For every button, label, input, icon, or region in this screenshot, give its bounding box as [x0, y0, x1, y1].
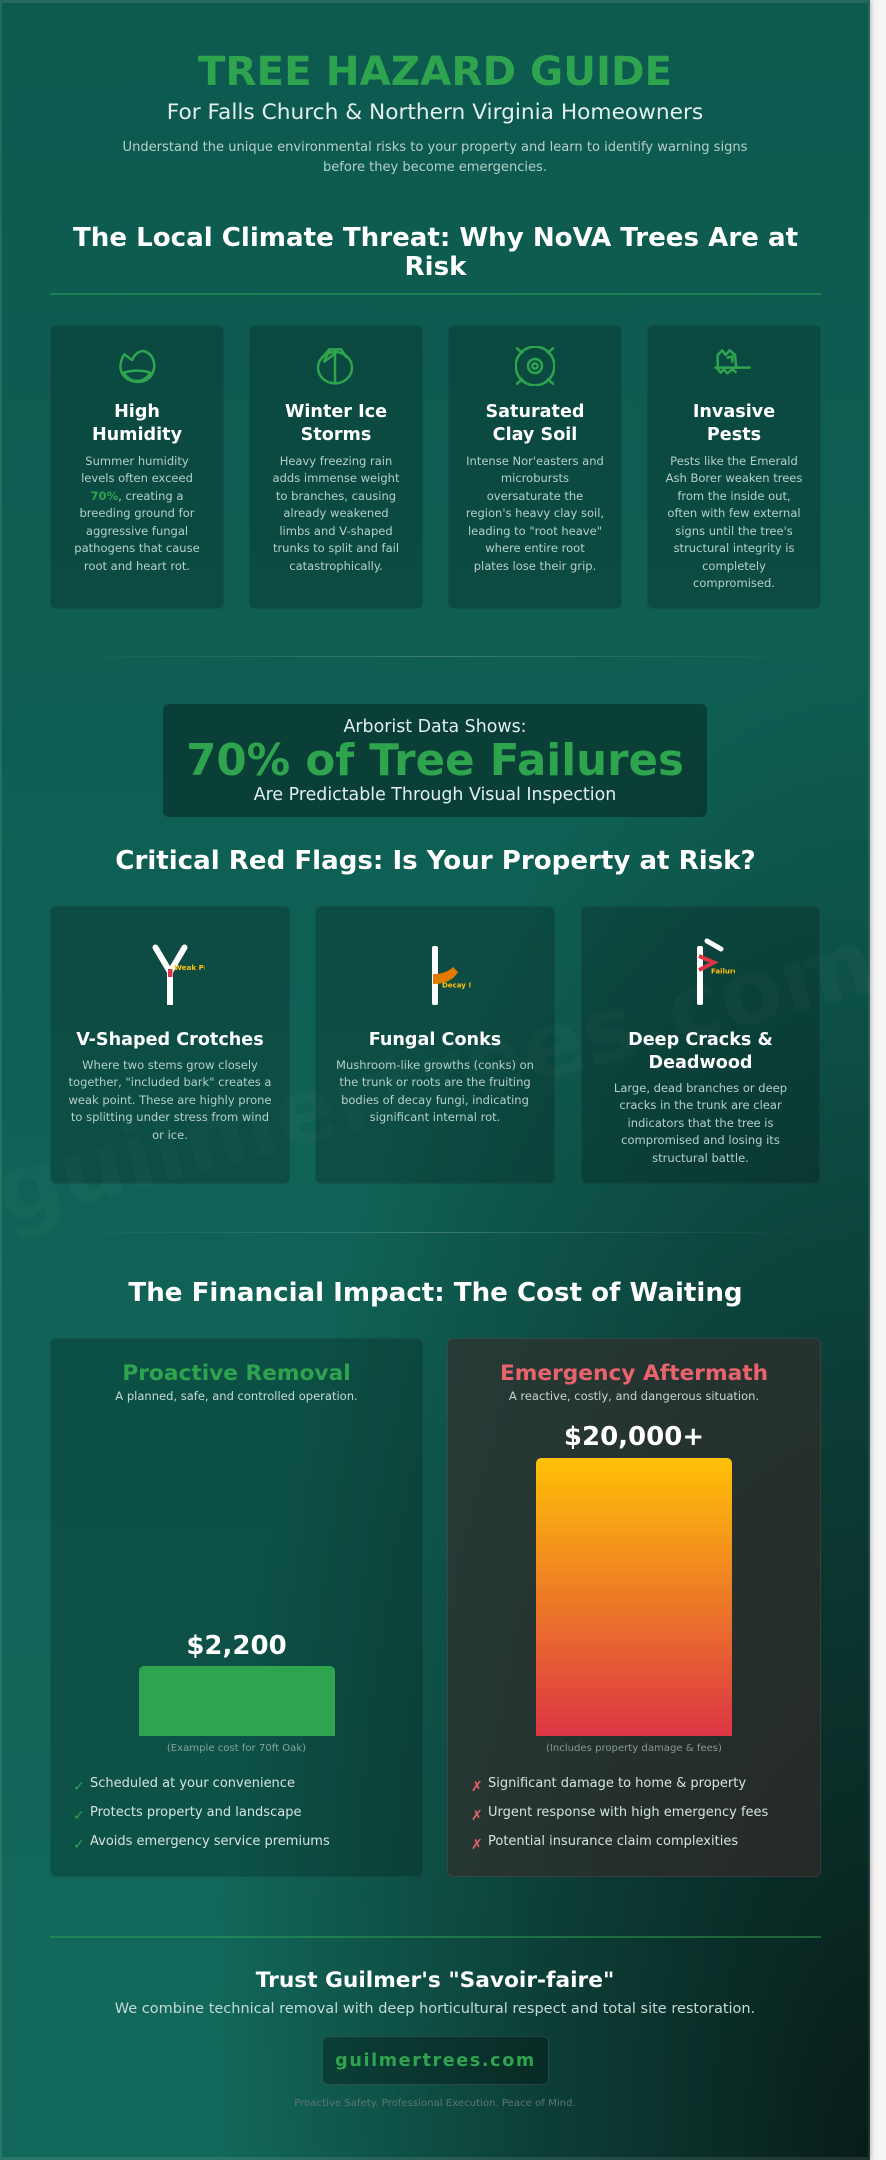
- divider: [50, 1232, 821, 1233]
- risk list: [471, 1776, 768, 1853]
- risk: Potential insurance claim complexities: [488, 1834, 738, 1849]
- cost note: (Includes property damage & fees): [546, 1743, 722, 1754]
- icon: ice storm: [316, 348, 354, 385]
- card title: [628, 1030, 773, 1073]
- heading: local climate threat: Risk: [405, 252, 466, 282]
- card title: Saturated: [486, 402, 584, 422]
- card title: Humidity: [92, 425, 182, 445]
- footer heading: Trust Guilmer's "Savoir-faire": [256, 1968, 614, 1993]
- card text: Summer humidity: [85, 454, 189, 468]
- panel: proactive removal: ✓: [73, 1779, 85, 1795]
- card text: together, "included bark" creates a: [69, 1075, 271, 1089]
- footer rule: [50, 1936, 821, 1938]
- card title: Deadwood: [648, 1053, 753, 1073]
- card text: Heavy freezing rain: [280, 454, 392, 468]
- cost note: (Example cost for 70ft Oak): [167, 1743, 306, 1754]
- panel title: Proactive Removal: [122, 1361, 351, 1386]
- card text: root and heart rot.: [84, 559, 190, 573]
- card text: to branches, causing: [276, 489, 396, 503]
- card text: Mushroom-like growths (conks) on: [336, 1058, 534, 1072]
- card text: [336, 1058, 534, 1124]
- card text: Intense Nor'easters and: [466, 454, 604, 468]
- panel subtitle: A planned, safe, and controlled operation.: [115, 1389, 358, 1403]
- card text: structural battle.: [652, 1151, 749, 1165]
- heading: local climate threat: The Local Climate Threat: Why NoVA Trees Are at: [73, 223, 798, 253]
- card title: Deep Cracks &: [628, 1030, 773, 1050]
- card text: weak point. These are highly prone: [68, 1093, 272, 1107]
- footer text: We combine technical removal with deep horticultural respect and total site restoration.: [115, 2001, 755, 2017]
- risk: Urgent response with high emergency fees: [488, 1805, 768, 1820]
- card text: structural integrity is: [674, 541, 794, 555]
- panel: proactive removal: [50, 1338, 423, 1877]
- panel: emergency aftermath: ✗: [471, 1837, 483, 1853]
- card text: completely: [702, 559, 766, 573]
- card text: breeding ground for: [80, 506, 194, 520]
- intro text: before they become emergencies.: [323, 160, 547, 174]
- panel: fungal conks: [315, 906, 555, 1184]
- card text: [666, 454, 802, 590]
- cost bar: [139, 1666, 335, 1736]
- card text: pathogens that cause: [74, 541, 200, 555]
- panel: emergency aftermath: [447, 1338, 821, 1877]
- card text: trunks to split and fail: [273, 541, 399, 555]
- benefit: Scheduled at your convenience: [90, 1776, 295, 1791]
- card title: [693, 402, 775, 445]
- card text: signs until the tree's: [675, 524, 793, 538]
- card text: [466, 454, 604, 573]
- callout: 70 percent statistic: [163, 704, 707, 817]
- icon: pests: [714, 349, 751, 375]
- card title: [92, 402, 182, 445]
- card text: already weakened: [283, 506, 389, 520]
- website badge: guilmertrees.com: [335, 2051, 536, 2071]
- illustration: fungal conk: [432, 946, 471, 1005]
- heading underline: [50, 293, 821, 295]
- benefit: Avoids emergency service premiums: [90, 1834, 330, 1849]
- icon: humidity: [119, 350, 156, 384]
- card text: limbs and V-shaped: [279, 524, 393, 538]
- panel: emergency aftermath: ✗: [471, 1779, 483, 1795]
- intro text: [123, 140, 747, 174]
- card text: indicators that the tree is: [628, 1116, 773, 1130]
- card text: compromised.: [693, 576, 775, 590]
- title: TREE HAZARD GUIDE: [198, 47, 672, 95]
- card text: from the inside out,: [677, 489, 791, 503]
- illustration: cracked trunk: [697, 938, 735, 1005]
- card text: [614, 1081, 787, 1165]
- card title: Pests: [707, 425, 761, 445]
- intro text: Understand the unique environmental risks to your property and learn to identify warning signs: [123, 140, 747, 154]
- illustration: fungal conk: Decay !: [442, 982, 471, 990]
- card text: levels often exceed: [81, 471, 193, 485]
- panel: saturated clay soil: [448, 325, 622, 609]
- card text: compromised and losing its: [621, 1133, 780, 1147]
- risk: Significant damage to home & property: [488, 1776, 746, 1791]
- card title: High: [114, 402, 160, 422]
- icon: soil: [515, 346, 555, 386]
- card text: [68, 1058, 272, 1142]
- card text: often with few external: [667, 506, 801, 520]
- heading: critical red flags: Critical Red Flags: Is Your Property at Risk?: [115, 846, 756, 876]
- card text: significant internal rot.: [370, 1110, 500, 1124]
- callout lead: Arborist Data Shows:: [343, 717, 526, 737]
- card text: Large, dead branches or deep: [614, 1081, 787, 1095]
- cost value: $20,000+: [564, 1422, 704, 1452]
- card text: catastrophically.: [289, 559, 383, 573]
- card text: bodies of decay fungi, indicating: [341, 1093, 529, 1107]
- card text: to splitting under stress from wind: [71, 1110, 269, 1124]
- divider: [50, 656, 821, 657]
- card text: adds immense weight: [273, 471, 399, 485]
- card title: Fungal Conks: [369, 1030, 501, 1050]
- card text: Where two stems grow closely: [82, 1058, 258, 1072]
- cost bar: [536, 1458, 732, 1736]
- panel: v-shaped crotches: [50, 906, 290, 1184]
- card text: or ice.: [152, 1128, 188, 1142]
- card text: [74, 454, 200, 573]
- panel: invasive pests: [647, 325, 821, 609]
- subtitle: For Falls Church & Northern Virginia Homeowners: [167, 100, 703, 125]
- card text: Ash Borer weaken trees: [666, 471, 802, 485]
- card title: Invasive: [693, 402, 775, 422]
- card text: aggressive fungal: [86, 524, 188, 538]
- card text: Pests like the Emerald: [670, 454, 798, 468]
- cost value: $2,200: [186, 1631, 287, 1661]
- panel: high humidity: [50, 325, 224, 609]
- website badge: [322, 2036, 549, 2085]
- card title: [285, 402, 387, 445]
- heading: financial impact: The Financial Impact: The Cost of Waiting: [128, 1278, 743, 1308]
- tagline: Proactive Safety. Professional Execution. Peace of Mind.: [294, 2098, 576, 2109]
- panel: emergency aftermath: ✗: [471, 1808, 483, 1824]
- card text: the trunk or roots are the fruiting: [339, 1075, 531, 1089]
- card text: region's heavy clay soil,: [466, 506, 604, 520]
- benefit: Protects property and landscape: [90, 1805, 301, 1820]
- card title: Storms: [301, 425, 371, 445]
- panel title: Emergency Aftermath: [500, 1361, 768, 1386]
- panel: proactive removal: ✓: [73, 1837, 85, 1853]
- benefit list: [73, 1776, 330, 1853]
- panel subtitle: A reactive, costly, and dangerous situation.: [509, 1389, 759, 1403]
- card title: [486, 402, 584, 445]
- callout number: 70% of Tree Failures: [186, 736, 684, 786]
- card title: V-Shaped Crotches: [76, 1030, 264, 1050]
- card text: where entire root: [485, 541, 585, 555]
- card text: cracks in the trunk are clear: [619, 1098, 782, 1112]
- panel: deep cracks and deadwood: [581, 906, 820, 1184]
- card text: plates lose their grip.: [474, 559, 596, 573]
- card text: microbursts: [501, 471, 569, 485]
- callout text: Are Predictable Through Visual Inspection: [254, 785, 616, 805]
- panel: proactive removal: ✓: [73, 1808, 85, 1824]
- heading: local climate threat: [73, 223, 798, 282]
- card text: 70%, creating a: [91, 489, 183, 503]
- card title: Clay Soil: [493, 425, 577, 445]
- card text: leading to "root heave": [468, 524, 602, 538]
- card text: oversaturate the: [487, 489, 583, 503]
- panel: winter ice storms: [249, 325, 423, 609]
- illustration: v-crotch tree: [152, 944, 205, 1005]
- card title: Winter Ice: [285, 402, 387, 422]
- card text: [273, 454, 400, 573]
